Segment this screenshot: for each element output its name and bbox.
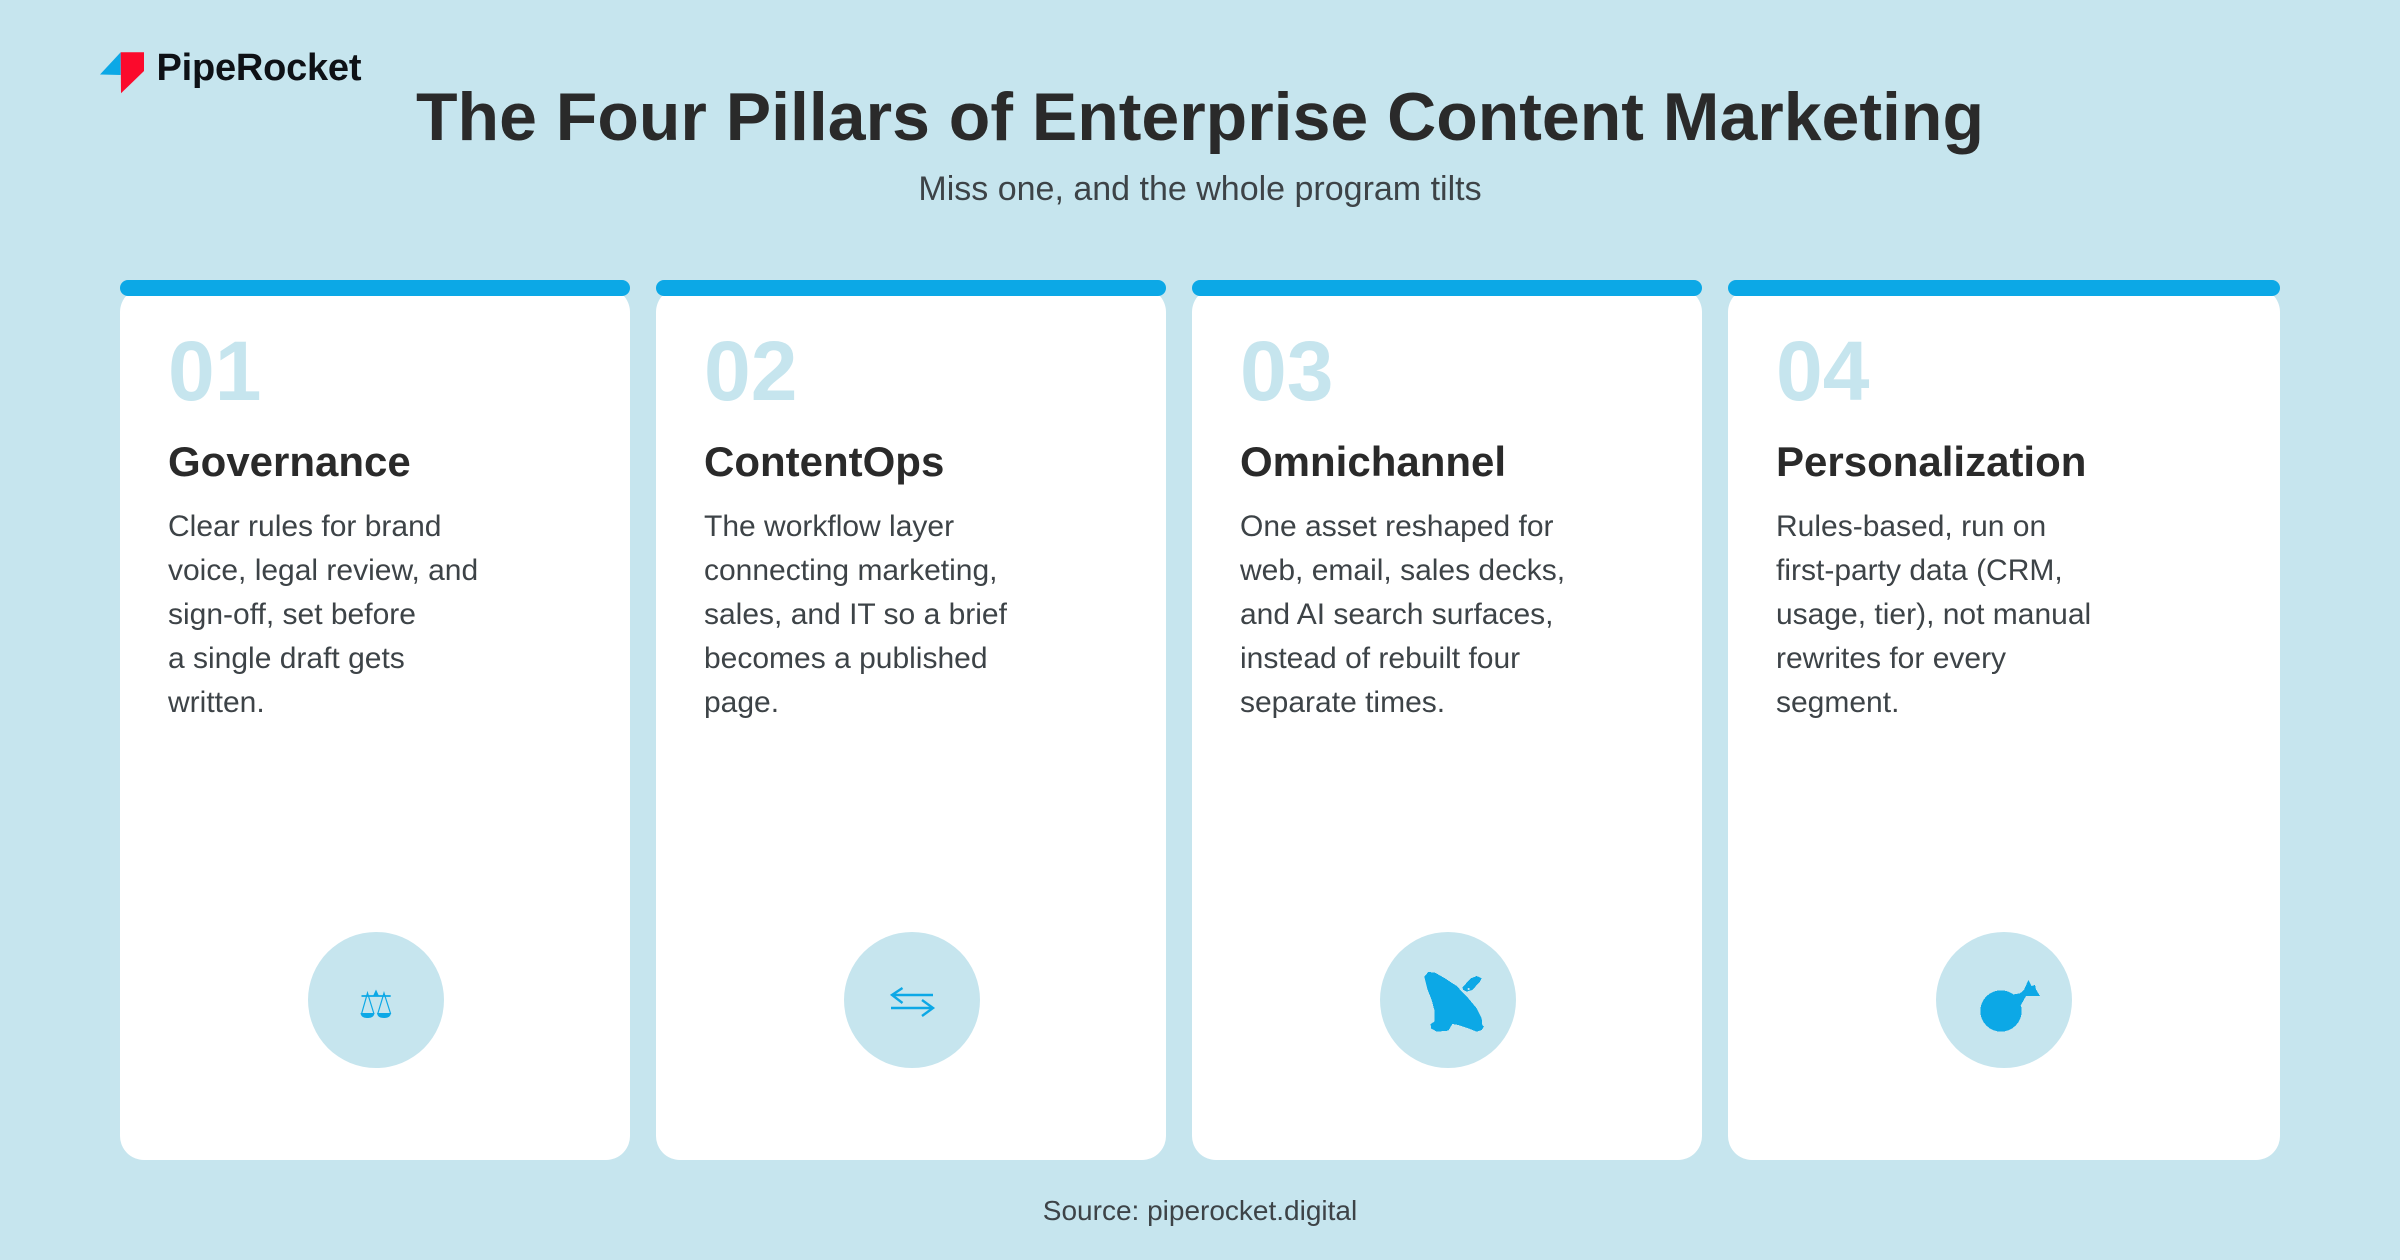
source note: Source: piperocket.digital bbox=[1043, 1195, 1357, 1226]
logo: PipeRocket bbox=[100, 47, 362, 94]
text: Personalization description: usage, tier), not manual bbox=[1776, 598, 2091, 631]
text: Personalization description: first-party data (CRM, bbox=[1776, 554, 2063, 587]
heading: Governance: Governance bbox=[168, 438, 411, 485]
heading: ContentOps: ContentOps bbox=[704, 438, 944, 485]
text: Omnichannel description: and AI search surfaces, bbox=[1240, 598, 1554, 631]
text: Governance description: a single draft gets bbox=[168, 642, 405, 675]
panel: Governance bbox=[120, 280, 630, 1160]
number 04: 04 bbox=[1776, 324, 1869, 418]
text: ContentOps description: becomes a published bbox=[704, 642, 988, 675]
text: ContentOps description: sales, and IT so a brief bbox=[704, 598, 1007, 631]
text: Personalization description bbox=[1776, 510, 2091, 719]
text: Omnichannel description: instead of rebuilt four bbox=[1240, 642, 1520, 675]
title: The Four Pillars of Enterprise Content Marketing bbox=[416, 78, 1984, 154]
text: Omnichannel description: One asset reshaped for bbox=[1240, 510, 1554, 542]
panel: ContentOps bbox=[656, 280, 1166, 1160]
icon: exchange arrows bbox=[844, 932, 980, 1068]
text: ContentOps description: The workflow layer bbox=[704, 510, 954, 542]
text: Governance description: written. bbox=[168, 686, 265, 719]
text: Personalization description: Rules-based, run on bbox=[1776, 510, 2046, 542]
text: ContentOps description bbox=[704, 510, 1007, 719]
panel: Personalization bbox=[1728, 280, 2280, 1160]
text: Personalization description: rewrites for every bbox=[1776, 642, 2006, 675]
text: Governance description: sign-off, set before bbox=[168, 598, 416, 631]
heading: Personalization: Personalization bbox=[1776, 438, 2086, 485]
icon: target dart bbox=[1936, 932, 2072, 1068]
heading: Omnichannel: Omnichannel bbox=[1240, 438, 1506, 485]
icon: rocket mark bbox=[100, 52, 144, 93]
subtitle: Miss one, and the whole program tilts bbox=[918, 170, 1482, 208]
text: Omnichannel description: web, email, sales decks, bbox=[1240, 554, 1565, 587]
number 01: 01 bbox=[168, 324, 261, 418]
panel: Omnichannel bbox=[1192, 280, 1702, 1160]
text: Omnichannel description bbox=[1240, 510, 1565, 719]
number 03: 03 bbox=[1240, 324, 1333, 418]
text: Governance description: Clear rules for brand bbox=[168, 510, 441, 542]
text: Governance description: voice, legal review, and bbox=[168, 554, 478, 587]
logo wordmark: PipeRocket bbox=[156, 47, 362, 89]
text: ContentOps description: connecting marketing, bbox=[704, 554, 998, 587]
text: Governance description bbox=[168, 510, 478, 719]
icon: scales bbox=[308, 932, 444, 1068]
text: ContentOps description: page. bbox=[704, 686, 779, 719]
number 02: 02 bbox=[704, 324, 797, 418]
icon: satellite dish bbox=[1380, 932, 1516, 1068]
text: Personalization description: segment. bbox=[1776, 686, 1899, 719]
text: Omnichannel description: separate times. bbox=[1240, 686, 1445, 719]
